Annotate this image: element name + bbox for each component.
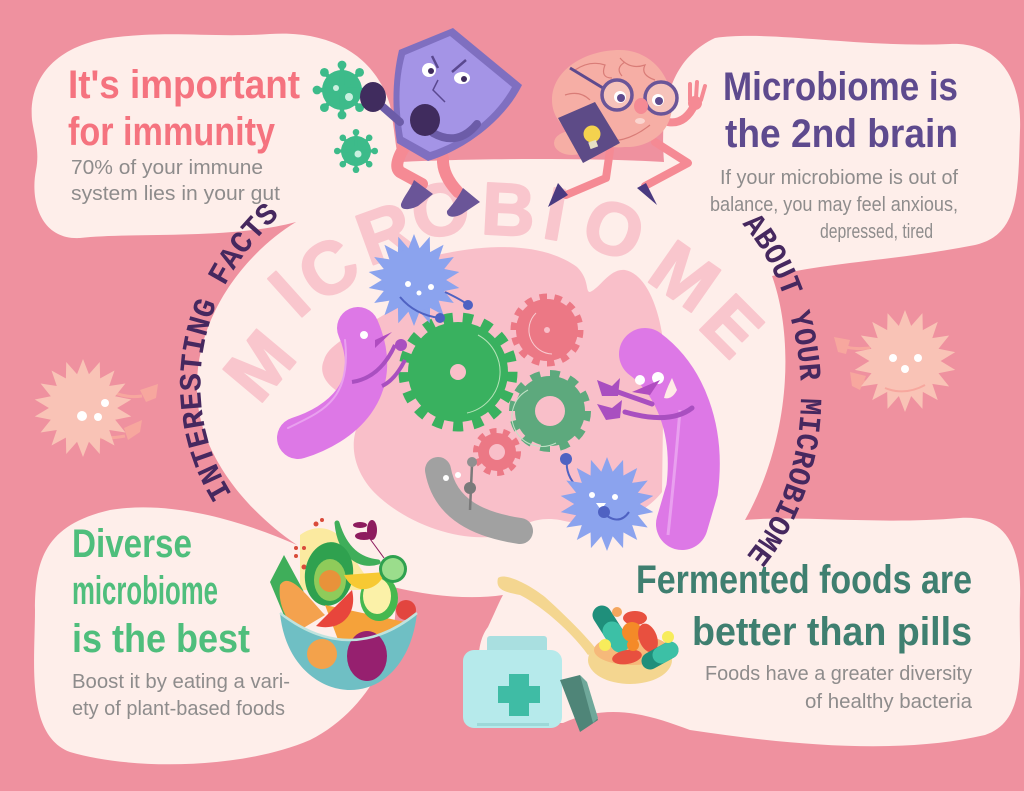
panel: diverse text (72, 522, 290, 720)
icon: gray bacterium (438, 457, 520, 531)
text arc: about your microbiome: ABOUT YOUR MICROBIOME (742, 216, 822, 567)
heading: fermented: better than pills (692, 610, 972, 654)
glasses (570, 68, 603, 88)
food: lettuce (270, 555, 312, 630)
heading: MICROBIOME arc letters: O (572, 180, 655, 278)
food: avocado (301, 539, 357, 609)
gloves (360, 82, 386, 112)
heading: MICROBIOME arc letters: R (346, 185, 425, 281)
heading: fermented: Fermented foods are (636, 558, 972, 602)
heading: diverse: Diverse (72, 522, 192, 566)
text: brain detail: depressed, tired (820, 221, 933, 243)
icon: salad bowl (270, 518, 417, 690)
icon: blue microbe bottom (560, 453, 654, 551)
heading: second brain: the 2nd brain (725, 112, 958, 156)
icon: peach microbe left (34, 359, 158, 457)
gear: pink small (476, 431, 518, 473)
text: fermented detail (705, 663, 973, 713)
icon: blue microbe top (368, 234, 473, 326)
heading: second brain (723, 65, 958, 156)
text: brain detail: balance, you may feel anxious, (710, 194, 958, 216)
heading: immunity: for immunity (68, 110, 276, 154)
text: brain detail: If your microbiome is out of (720, 167, 958, 189)
cap (560, 675, 598, 732)
icon: purple bacterium right (597, 354, 694, 535)
legs (566, 104, 695, 195)
cross (498, 674, 540, 716)
heading: immunity (68, 63, 300, 154)
text: fermented detail: of healthy bacteria (805, 691, 973, 713)
text: diverse detail (72, 671, 290, 720)
icon: medicine jar (463, 636, 598, 732)
gear: green large (404, 318, 512, 426)
heading: MICROBIOME arc letters: M (208, 315, 311, 416)
gear: green medium (512, 374, 587, 448)
text arc: interesting facts: INTERESTING FACTS (180, 204, 276, 502)
heading: MICROBIOME arc letters (208, 165, 779, 416)
book with light bulb (558, 102, 620, 163)
pills (602, 615, 618, 640)
heading: immunity: It's important (68, 63, 300, 107)
food: orange squash (307, 639, 337, 669)
icon: green viruses (313, 61, 378, 173)
heading: diverse: microbiome (72, 569, 218, 613)
hand (690, 82, 705, 100)
shoes (401, 180, 433, 209)
icon: shield character (360, 28, 522, 217)
illustration: gears (404, 297, 587, 473)
heading: MICROBIOME arc letters: M (636, 224, 734, 328)
legs (397, 143, 458, 192)
face (422, 63, 436, 77)
food: tomato (316, 590, 353, 627)
text: fermented detail: Foods have a greater diversity (705, 663, 972, 685)
heading: diverse (72, 522, 250, 661)
food: cucumber (379, 555, 407, 583)
text: immunity detail (71, 157, 280, 205)
food: apple (360, 575, 398, 621)
food: pea pod (337, 523, 378, 563)
text: immunity detail: system lies in your gut (71, 183, 280, 205)
heading: MICROBIOME arc letters: I (538, 171, 573, 257)
shield body (393, 28, 522, 161)
heading: MICROBIOME arc letters: B (479, 167, 537, 252)
icon: peach microbe right (834, 310, 956, 412)
food: strawberry (396, 600, 416, 620)
jar lid neck (487, 636, 547, 656)
panel: second brain text (710, 65, 958, 243)
food: orange base (325, 605, 405, 645)
text: immunity detail: 70% of your immune (71, 157, 263, 179)
food: beet (347, 631, 387, 681)
food: lemon (344, 572, 385, 589)
text: diverse detail: ety of plant-based foods (72, 698, 285, 720)
icon: purple bacterium left (288, 328, 407, 438)
spoon (497, 576, 597, 655)
food: dots (294, 518, 324, 570)
food: yellow splash (300, 528, 375, 590)
heading: fermented (636, 558, 972, 654)
arms (383, 107, 477, 138)
bowl body (280, 613, 417, 690)
gear: pink top (514, 297, 580, 363)
heading: MICROBIOME arc letters: O (406, 165, 475, 255)
heading: second brain: Microbiome is (723, 65, 958, 109)
bowl rim (280, 613, 417, 640)
stomach shape (322, 247, 664, 537)
panel: immunity text (68, 63, 300, 205)
heading: diverse: is the best (72, 617, 250, 661)
panel: fermented text (636, 558, 973, 713)
food: melon slice (280, 581, 325, 630)
heading: MICROBIOME arc letters: I (254, 256, 324, 332)
jar body (463, 650, 562, 728)
brain body (552, 50, 672, 147)
icon: brain character (548, 50, 705, 207)
food: herb (353, 520, 384, 558)
text: brain detail (710, 167, 958, 243)
text: diverse detail: Boost it by eating a vari- (72, 671, 290, 693)
icon: spoon of pills (497, 576, 674, 684)
shoes (548, 183, 568, 207)
heading: MICROBIOME arc letters: C (283, 219, 373, 318)
heading: MICROBIOME arc letters: E (685, 279, 779, 373)
